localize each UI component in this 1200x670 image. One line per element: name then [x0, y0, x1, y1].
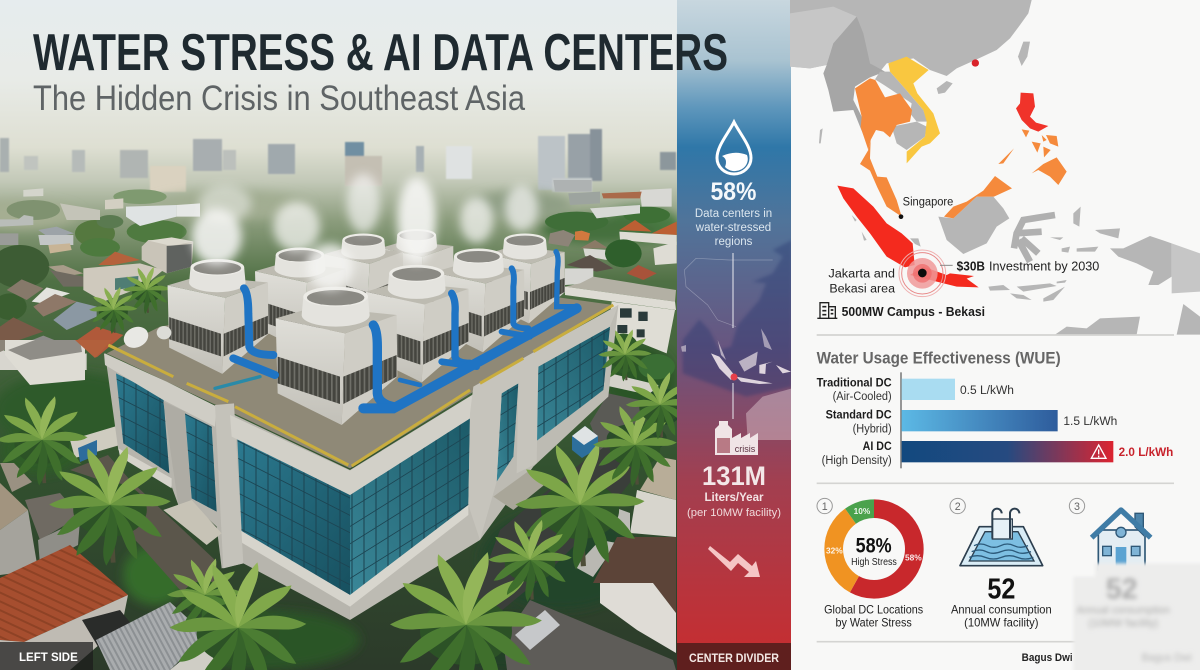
- philippine southern islands: [998, 129, 1067, 185]
- bekasi pulse marker: [899, 250, 946, 297]
- center divider label: [677, 643, 791, 670]
- arrow: falling trend: [708, 546, 760, 577]
- left side label: LEFT SIDE: [19, 652, 78, 664]
- bar: ai: [822, 439, 1173, 467]
- stat caption: Data centers in: [695, 208, 772, 220]
- yellow railings: [108, 305, 613, 466]
- blurred obscured area: (10MW facility): [1088, 618, 1158, 630]
- donut chart: water stress: 58%: [856, 533, 892, 557]
- parapet and pillars: [104, 305, 618, 568]
- bar: traditional: Traditional DC: [817, 376, 892, 390]
- faint map of southeast asia: [681, 240, 792, 440]
- rooftop slab: [107, 280, 613, 468]
- donut chart: water stress: High Stress: [851, 557, 897, 568]
- icon: bottle and factory: [715, 421, 758, 455]
- steam plumes: [192, 173, 538, 290]
- donut chart: water stress: 32%: [826, 545, 843, 555]
- location marker: [730, 374, 738, 380]
- section dividers: [817, 335, 1174, 642]
- grey neighbouring land: [790, 0, 1200, 335]
- bar: standard: (Hybrid): [853, 421, 892, 435]
- donut chart: water stress: Global DC Locations: [824, 604, 923, 617]
- malay peninsula: [860, 140, 902, 217]
- bar: traditional: (Air-Cooled): [833, 389, 892, 403]
- bar: ai: AI DC: [863, 439, 892, 453]
- lower right panels: [817, 335, 1200, 670]
- title: WATER STRESS & AI DATA CENTERS: [33, 24, 728, 82]
- malaysian borneo: [944, 176, 1012, 218]
- chart heading: Water Usage Effectiveness (WUE): [817, 349, 1061, 367]
- donut chart: water stress: 10%: [854, 506, 871, 516]
- investment callout: $30B: [957, 259, 985, 274]
- left side label: [0, 642, 93, 670]
- panel: center divider: [677, 0, 792, 670]
- java: [910, 267, 979, 287]
- data center building with cooling towers: [104, 173, 618, 620]
- icon and stat: swimming pools: 52: [987, 573, 1015, 605]
- building body: [105, 305, 618, 620]
- neighbourhood upper right: [545, 180, 683, 453]
- investment callout: Investment by 2030: [989, 259, 1099, 274]
- neighbourhood upper left: [0, 188, 200, 370]
- stat unit: Liters/Year: [704, 490, 764, 504]
- sea shading: [683, 240, 792, 397]
- thailand: [855, 78, 912, 150]
- stat caption: water-stressed: [695, 222, 771, 234]
- icon: water drop: [717, 122, 751, 174]
- mid-ground trees and ground: [0, 191, 680, 670]
- hong kong marker: [972, 59, 979, 67]
- australia: [746, 388, 792, 440]
- neighbouring houses lower: [0, 340, 676, 670]
- icon: campus building: [817, 303, 837, 318]
- bar: ai: (High Density): [822, 453, 892, 467]
- stat: 131M: 131M: [702, 461, 766, 491]
- icon: house: [1069, 498, 1151, 570]
- subtitle: The Hidden Crisis in Southeast Asia: [33, 79, 525, 118]
- donut chart: water stress: 58%: [905, 553, 922, 563]
- stat note: (per 10MW facility): [687, 507, 781, 519]
- blurred obscured area: Bagus Dwi: [1142, 652, 1192, 664]
- jakarta label: Bekasi area: [829, 282, 895, 296]
- blurred obscured area: Annual consumption: [1077, 605, 1170, 617]
- bar: standard: 1.5 L/kWh: [1063, 414, 1117, 428]
- bar: traditional: 0.5 L/kWh: [960, 383, 1014, 397]
- center divider label: CENTER DIVIDER: [689, 651, 779, 665]
- blurred obscured area: [1073, 563, 1200, 670]
- road left: [70, 455, 225, 600]
- delivery truck: [572, 426, 598, 458]
- icon and stat: swimming pools: (10MW facility): [964, 617, 1039, 630]
- foreground palm trees: [0, 328, 694, 670]
- panel: right background: [791, 0, 1200, 670]
- icon: house: 3: [1074, 501, 1080, 513]
- jakarta label: [828, 267, 895, 296]
- stat caption: regions: [715, 236, 753, 248]
- icon and stat: swimming pools: [950, 498, 1052, 630]
- singapore label: Singapore: [903, 195, 953, 209]
- connector lines: [732, 253, 734, 419]
- bar chart: water usage effectiveness: [817, 372, 1173, 468]
- donut chart: water stress: by Water Stress: [835, 617, 912, 630]
- jakarta label: Jakarta and: [828, 267, 895, 281]
- cooling towers: [168, 229, 565, 425]
- investment callout: [940, 259, 1099, 274]
- blue water pipes: [215, 252, 577, 408]
- blurred obscured area: 52: [1106, 573, 1138, 605]
- land outline: [684, 258, 773, 327]
- stat: 58 percent: 58%: [710, 178, 756, 206]
- icon and stat: swimming pools: 2: [955, 501, 961, 513]
- panel: left photo of data center: [0, 0, 694, 670]
- axis: [899, 372, 903, 468]
- pale land: [681, 328, 791, 384]
- donut chart: water stress: 1: [822, 501, 828, 513]
- sumatra: [837, 186, 915, 267]
- road right: [470, 440, 640, 620]
- icon and stat: swimming pools: Annual consumption: [951, 604, 1052, 617]
- stat caption: [695, 208, 772, 248]
- credit: Bagus Dwi: [1022, 652, 1073, 664]
- distant skyline: [0, 129, 676, 192]
- sky and ground background: [0, 0, 677, 670]
- sulawesi: [1014, 215, 1055, 262]
- bar: traditional: [817, 376, 1014, 403]
- luzon: [1016, 93, 1048, 132]
- singapore marker: [899, 214, 903, 219]
- bar: standard: [826, 407, 1117, 435]
- icon: bottle and factory: crisis: [735, 444, 756, 454]
- bar: ai: 2.0 L/kWh: [1119, 445, 1173, 459]
- campus label: 500MW Campus - Bekasi: [842, 305, 985, 319]
- bar: standard: Standard DC: [826, 407, 892, 421]
- map of southeast asia: [790, 0, 1200, 335]
- gradient background: [677, 0, 791, 670]
- vietnam: [888, 57, 940, 163]
- satellite dishes: [120, 323, 171, 352]
- donut chart: water stress: [817, 498, 923, 630]
